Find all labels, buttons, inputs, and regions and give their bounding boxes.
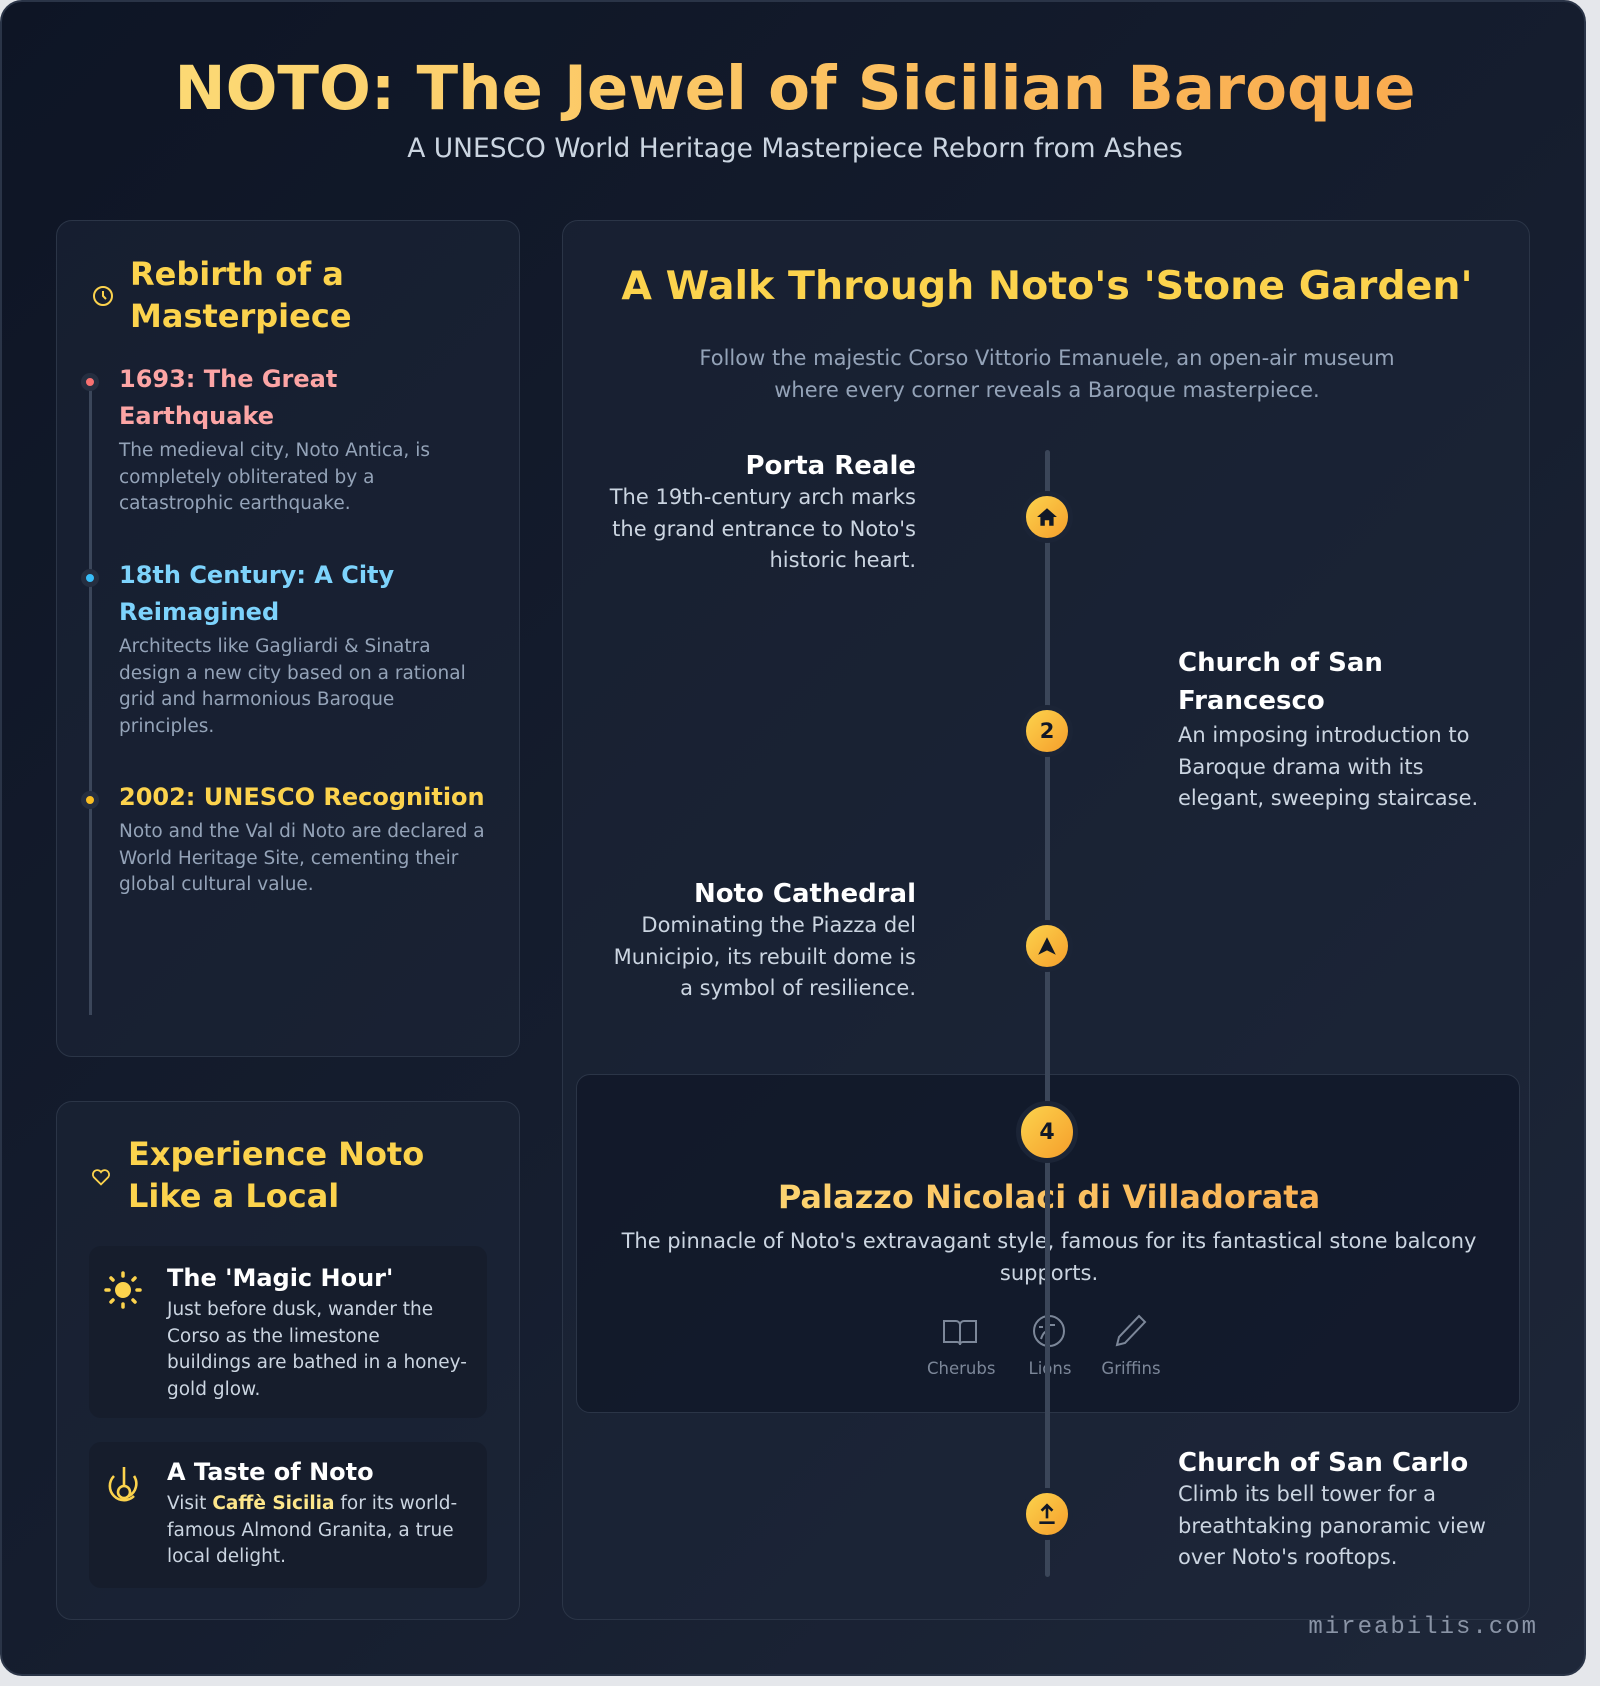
stop: porta reale (610, 451, 916, 572)
stop: cathedral: a symbol of resilience. (680, 976, 916, 1000)
icon: sun (104, 1271, 142, 1309)
panel: walk through stone garden (562, 220, 1530, 1620)
item 18th century: grid and harmonious Baroque (119, 689, 394, 710)
item 2002 (81, 783, 485, 895)
icon: clock (93, 286, 113, 306)
item 18th century: Architects like Gagliardi & Sinatra (119, 636, 431, 657)
stop: porta reale: The 19th-century arch marks (610, 485, 916, 509)
item 2002: Noto and the Val di Noto are declared a (119, 821, 485, 842)
item 1693: Earthquake (119, 402, 274, 430)
stop: san carlo: breathtaking panoramic view (1178, 1514, 1486, 1538)
icon row: cherubs lions griffins: Lions (1029, 1359, 1071, 1378)
tip: taste of noto (89, 1442, 487, 1588)
tip: taste of noto: local delight. (167, 1546, 286, 1567)
node 4: 4 (1039, 1120, 1055, 1144)
tip: magic hour: The 'Magic Hour' (167, 1264, 393, 1292)
intro text: Follow the majestic Corso Vittorio Emanuele, an open-air museum (699, 346, 1395, 370)
item 18th century: 18th Century: A City (119, 561, 394, 589)
stop: san carlo: Climb its bell tower for a (1178, 1482, 1436, 1506)
item 18th century: Reimagined (119, 598, 279, 626)
stop: porta reale: Porta Reale (745, 451, 916, 481)
tip: magic hour: buildings are bathed in a honey- (167, 1352, 467, 1373)
item 18th century (81, 561, 466, 736)
timeline line (1045, 450, 1050, 1577)
item 2002: global cultural value. (119, 874, 314, 895)
node 2 (1021, 705, 1073, 757)
item 2002: World Heritage Site, cementing their (119, 848, 458, 868)
item 18th century: principles. (119, 716, 214, 736)
panel: experience like a local (56, 1101, 520, 1620)
tip: taste of noto: A Taste of Noto (167, 1458, 374, 1486)
stop: cathedral: Municipio, its rebuilt dome is (614, 944, 916, 968)
stop: san francesco: Francesco (1178, 686, 1325, 716)
tip: magic hour: Just before dusk, wander the (167, 1299, 433, 1320)
tip: magic hour: Corso as the limestone (167, 1326, 380, 1346)
palazzo text: supports. (1000, 1261, 1098, 1285)
intro text (699, 346, 1395, 402)
title: NOTO: The Jewel of Sicilian Baroque (175, 53, 1415, 124)
panel: rebirth timeline (56, 220, 520, 1057)
item 1693: 1693: The Great (119, 365, 337, 393)
icon: granita (108, 1467, 138, 1502)
stop: san carlo: Church of San Carlo (1178, 1448, 1468, 1478)
palazzo text (622, 1229, 1476, 1285)
palazzo text: The pinnacle of Noto's extravagant style, famous for its fantastical stone balcony (622, 1229, 1476, 1253)
stop: porta reale: the grand entrance to Noto's (612, 516, 916, 540)
timeline line (89, 383, 92, 1015)
tip: taste of noto: Visit Caffè Sicilia for its world- (167, 1493, 457, 1514)
node 4 (1016, 1101, 1078, 1163)
palazzo title: Palazzo Nicolaci di Villadorata (778, 1178, 1320, 1216)
heading: Masterpiece (130, 297, 352, 335)
icon row: cherubs lions griffins: Cherubs (927, 1359, 995, 1378)
item 1693: completely obliterated by a (119, 466, 374, 488)
heading (128, 1135, 424, 1215)
watermark: mireabilis.com (1308, 1614, 1538, 1641)
stop: porta reale: historic heart. (770, 548, 916, 572)
stop: san francesco: elegant, sweeping staircase. (1178, 786, 1478, 810)
stop: cathedral: Dominating the Piazza del (641, 913, 916, 937)
icon row: cherubs lions griffins (927, 1314, 1161, 1378)
heading: Rebirth of a (130, 255, 344, 293)
heading (130, 255, 352, 335)
node 2: 2 (1040, 719, 1054, 743)
stop: cathedral: Noto Cathedral (694, 879, 916, 909)
tip: magic hour (89, 1246, 487, 1418)
subtitle: A UNESCO World Heritage Masterpiece Reborn from Ashes (407, 133, 1183, 164)
item 1693: catastrophic earthquake. (119, 493, 351, 514)
heading: Experience Noto (128, 1135, 424, 1173)
item 1693: The medieval city, Noto Antica, is (119, 440, 430, 461)
palazzo title (577, 1175, 1521, 1219)
icon: heart (92, 1169, 110, 1186)
node 5: upload (1021, 1488, 1073, 1540)
item 1693 (81, 365, 430, 514)
item 2002: 2002: UNESCO Recognition (119, 783, 485, 811)
heading: Like a Local (128, 1177, 339, 1215)
stop: san francesco (1178, 648, 1478, 810)
stop: san francesco: An imposing introduction to (1178, 723, 1469, 747)
stop: cathedral (614, 879, 916, 1000)
intro text: where every corner reveals a Baroque masterpiece. (774, 378, 1320, 402)
palazzo box (576, 1074, 1520, 1413)
tip: taste of noto: famous Almond Granita, a true (167, 1520, 454, 1540)
stop: san carlo: over Noto's rooftops. (1178, 1545, 1397, 1569)
node 1: home (1021, 491, 1073, 543)
stop: san carlo (1178, 1448, 1486, 1569)
stop: san francesco: Baroque drama with its (1178, 754, 1424, 778)
node 3: cathedral (1021, 920, 1073, 972)
stop: san francesco: Church of San (1178, 648, 1383, 678)
tip: magic hour: gold glow. (167, 1378, 260, 1400)
icon row: cherubs lions griffins: Griffins (1101, 1359, 1161, 1378)
item 18th century: design a new city based on a rational (119, 662, 466, 684)
heading: A Walk Through Noto's 'Stone Garden' (621, 263, 1473, 309)
